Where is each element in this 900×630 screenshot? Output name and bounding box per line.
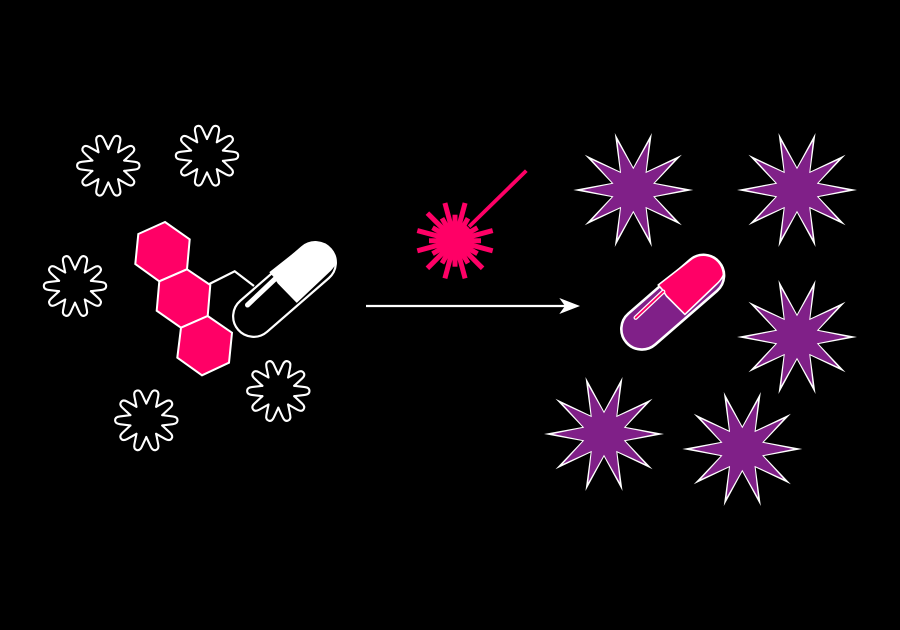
icon: inactive molecule flower 3 xyxy=(44,255,106,317)
icon: laser burst with beam xyxy=(417,171,526,278)
icon: pink hexagon molecule with linker xyxy=(135,222,254,375)
icon: activated star 2 xyxy=(737,133,857,247)
icon: activated star 1 xyxy=(573,133,693,247)
icon: activated star 4 xyxy=(544,377,664,491)
icon: capsule, pink and purple xyxy=(613,246,732,358)
icon: capsule, white and black xyxy=(225,234,344,345)
icon: activated star 5 xyxy=(682,392,802,506)
icon: inactive molecule flower 4 xyxy=(115,389,178,452)
icon: inactive molecule flower 5 xyxy=(247,360,310,422)
icon: activated star 3 xyxy=(737,280,857,394)
icon: inactive molecule flower 1 xyxy=(77,134,140,197)
icon: inactive molecule flower 2 xyxy=(176,124,238,187)
arrow xyxy=(366,298,580,314)
